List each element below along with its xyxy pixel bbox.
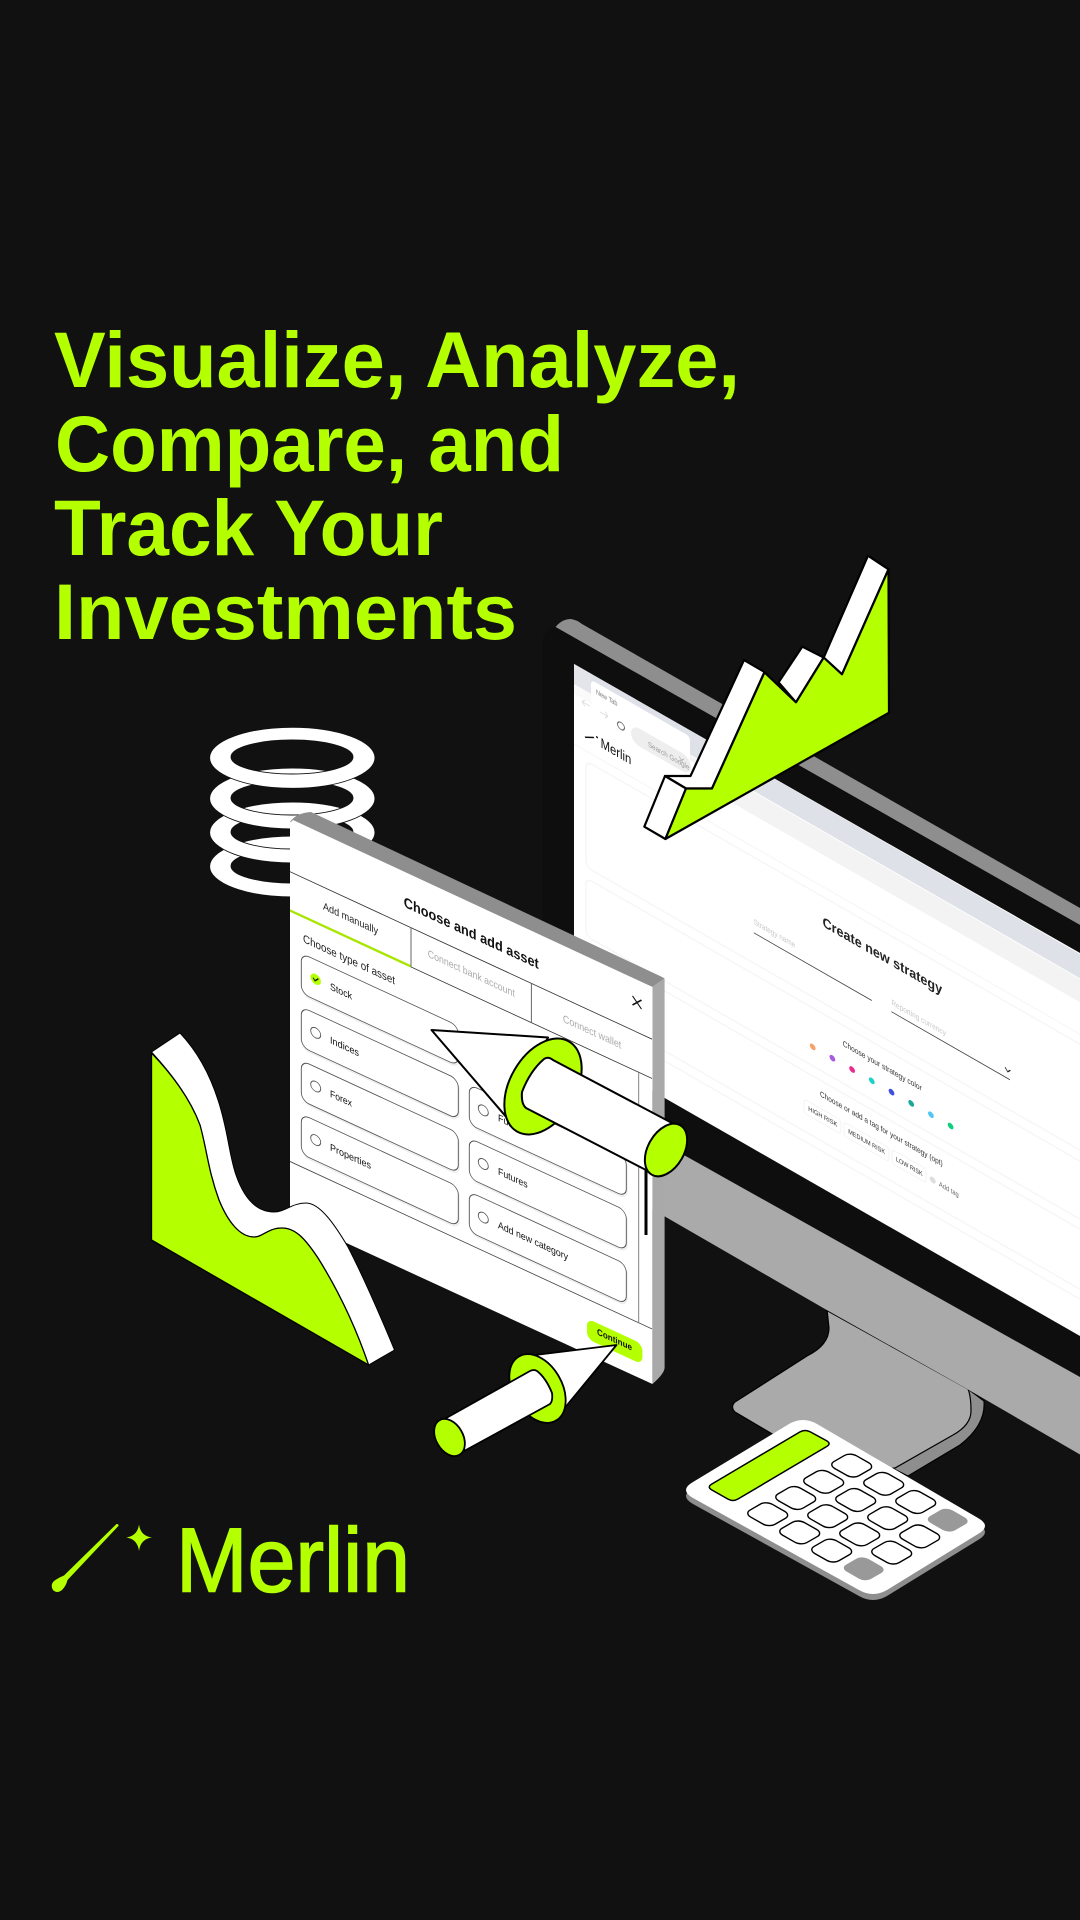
green wave chart xyxy=(152,1033,394,1365)
dialog heading: Choose and add asset xyxy=(404,894,539,973)
calculator body xyxy=(686,1420,985,1594)
browser chrome xyxy=(574,664,1080,1034)
strategy tags: HIGH RISK xyxy=(808,1106,838,1129)
calculator xyxy=(686,1420,985,1600)
green rising chart xyxy=(644,556,889,839)
form heading: Create new strategy xyxy=(823,914,943,999)
asset labels: Properties xyxy=(330,1142,371,1172)
asset labels: Futures xyxy=(498,1166,528,1191)
close icon xyxy=(632,996,642,1009)
asset cards left column xyxy=(301,953,459,1228)
strategy colour picker xyxy=(810,1019,954,1131)
monitor back edge xyxy=(556,619,1080,925)
monitor stand xyxy=(732,1300,984,1476)
strategy tags: MEDIUM RISK xyxy=(848,1129,885,1156)
icon: magic wand xyxy=(52,1524,119,1592)
calculator keys xyxy=(744,1452,971,1582)
title: Investments xyxy=(54,567,517,656)
browser chrome: New Tab xyxy=(596,687,617,708)
strategy tags: Add tag xyxy=(939,1180,959,1199)
strategy tags: Choose or add a tag for your strategy (opt) xyxy=(820,1089,943,1168)
browser chrome: Search Google xyxy=(648,740,690,772)
coin stack xyxy=(210,727,375,897)
tablet: choose and add asset dialog xyxy=(290,812,665,1384)
asset cards right column xyxy=(469,1085,627,1306)
Merlin logo xyxy=(52,1511,410,1612)
cursor arrow lower xyxy=(428,1344,616,1462)
tabs xyxy=(290,872,652,1078)
title xyxy=(54,315,740,656)
tablet edges xyxy=(290,812,665,1384)
faint form panels xyxy=(586,761,1080,1360)
small Merlin logo xyxy=(585,726,631,769)
wordmark: Merlin xyxy=(176,1511,410,1612)
asset labels: Add new category xyxy=(498,1219,569,1264)
tablet face xyxy=(290,820,652,1384)
monitor bezel xyxy=(542,627,1080,1400)
asset labels xyxy=(330,981,569,1264)
asset labels: Forex xyxy=(330,1088,353,1110)
asset labels: Indices xyxy=(330,1035,359,1059)
tabs: Add manually xyxy=(323,901,378,938)
form inputs: Reporting currency xyxy=(891,997,946,1038)
title: Track Your xyxy=(54,483,443,572)
tabs: Connect wallet xyxy=(563,1013,621,1052)
form inputs xyxy=(754,917,1010,1080)
strategy tags xyxy=(804,1079,959,1202)
strategy tags: LOW RISK xyxy=(896,1156,923,1178)
footer and scroll track xyxy=(290,911,652,1329)
scrollbar thumb xyxy=(644,1170,648,1235)
calculator base xyxy=(686,1426,985,1600)
asset type heading: Choose type of asset xyxy=(303,932,396,988)
icon: sparkle xyxy=(126,1524,152,1551)
selected radio xyxy=(310,972,321,987)
calculator display xyxy=(709,1430,829,1500)
small Merlin logo: Merlin xyxy=(601,735,631,769)
continue button: Continue xyxy=(597,1327,632,1354)
asset labels: Funds xyxy=(498,1112,523,1135)
title: Compare, and xyxy=(55,399,564,488)
strategy colour picker: Choose your strategy color xyxy=(843,1038,922,1093)
monitor lower frame xyxy=(600,1108,1080,1454)
title: Visualize, Analyze, xyxy=(54,315,740,404)
continue button xyxy=(587,1318,642,1364)
screen xyxy=(574,664,1080,1360)
form inputs: Strategy name xyxy=(754,917,795,950)
asset labels: Stock xyxy=(330,981,353,1003)
cursor arrow upper xyxy=(432,1025,696,1184)
tabs: Connect bank account xyxy=(428,948,515,1000)
desktop monitor xyxy=(542,619,1080,1476)
